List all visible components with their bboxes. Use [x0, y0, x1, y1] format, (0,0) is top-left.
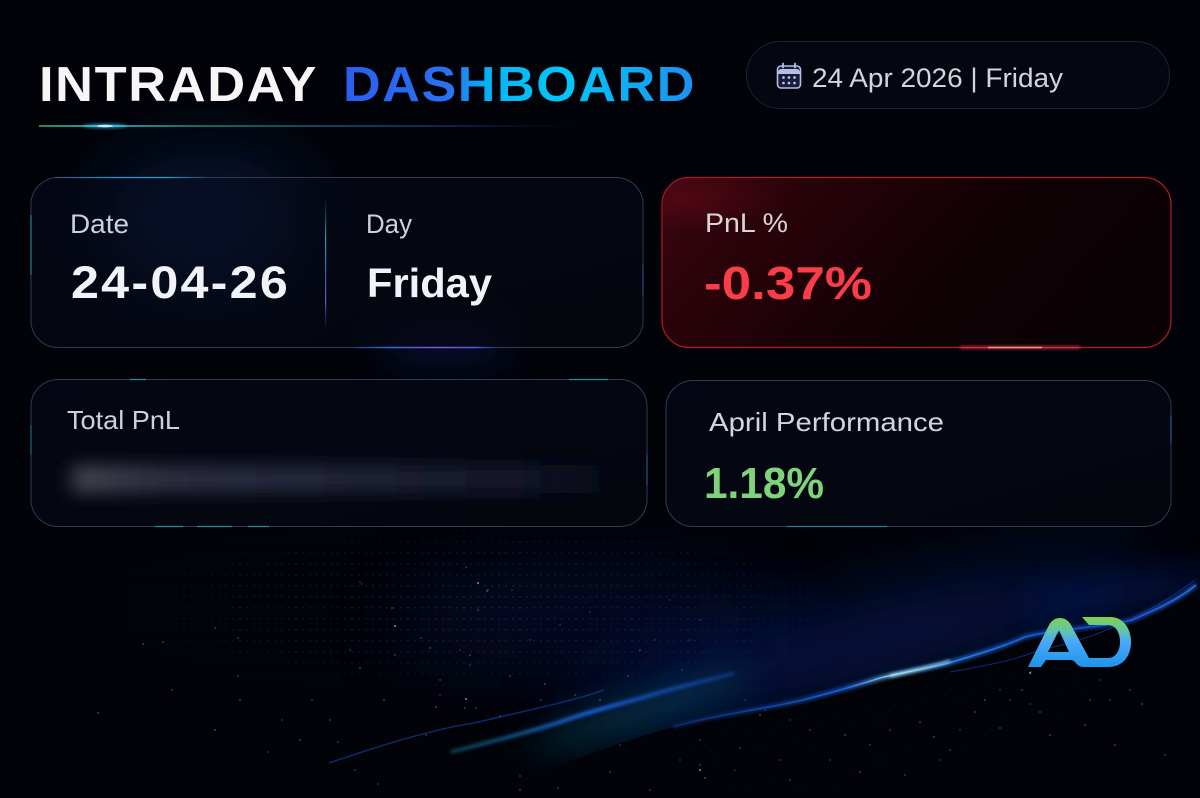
panel: date and day [31, 178, 643, 348]
panel: PnL percent [662, 178, 1171, 348]
icon: calendar [778, 64, 800, 88]
April value: 1.18% [704, 459, 824, 508]
title underline with flare [39, 124, 580, 128]
day value: Friday [367, 260, 492, 306]
date value: 24-04-26 [71, 257, 290, 308]
April label: April Performance [709, 407, 944, 437]
background glows and light streaks [105, 155, 1200, 763]
day label: Day [366, 209, 412, 239]
title: DASHBOARD [343, 58, 696, 112]
date pill [746, 42, 1170, 108]
blurred amount [72, 465, 604, 493]
date label: Date [70, 209, 129, 239]
title: INTRADAY [39, 58, 318, 112]
panel: total PnL [31, 380, 647, 526]
PnL value: -0.37% [704, 257, 872, 309]
PnL label: PnL % [705, 208, 788, 238]
total PnL label: Total PnL [67, 405, 180, 435]
divider [325, 200, 326, 327]
panel: April performance [666, 380, 1171, 526]
date text: 24 Apr 2026 | Friday [812, 63, 1064, 93]
icon: AD logo [1028, 617, 1131, 667]
particle field [98, 567, 1165, 790]
title [39, 58, 696, 112]
